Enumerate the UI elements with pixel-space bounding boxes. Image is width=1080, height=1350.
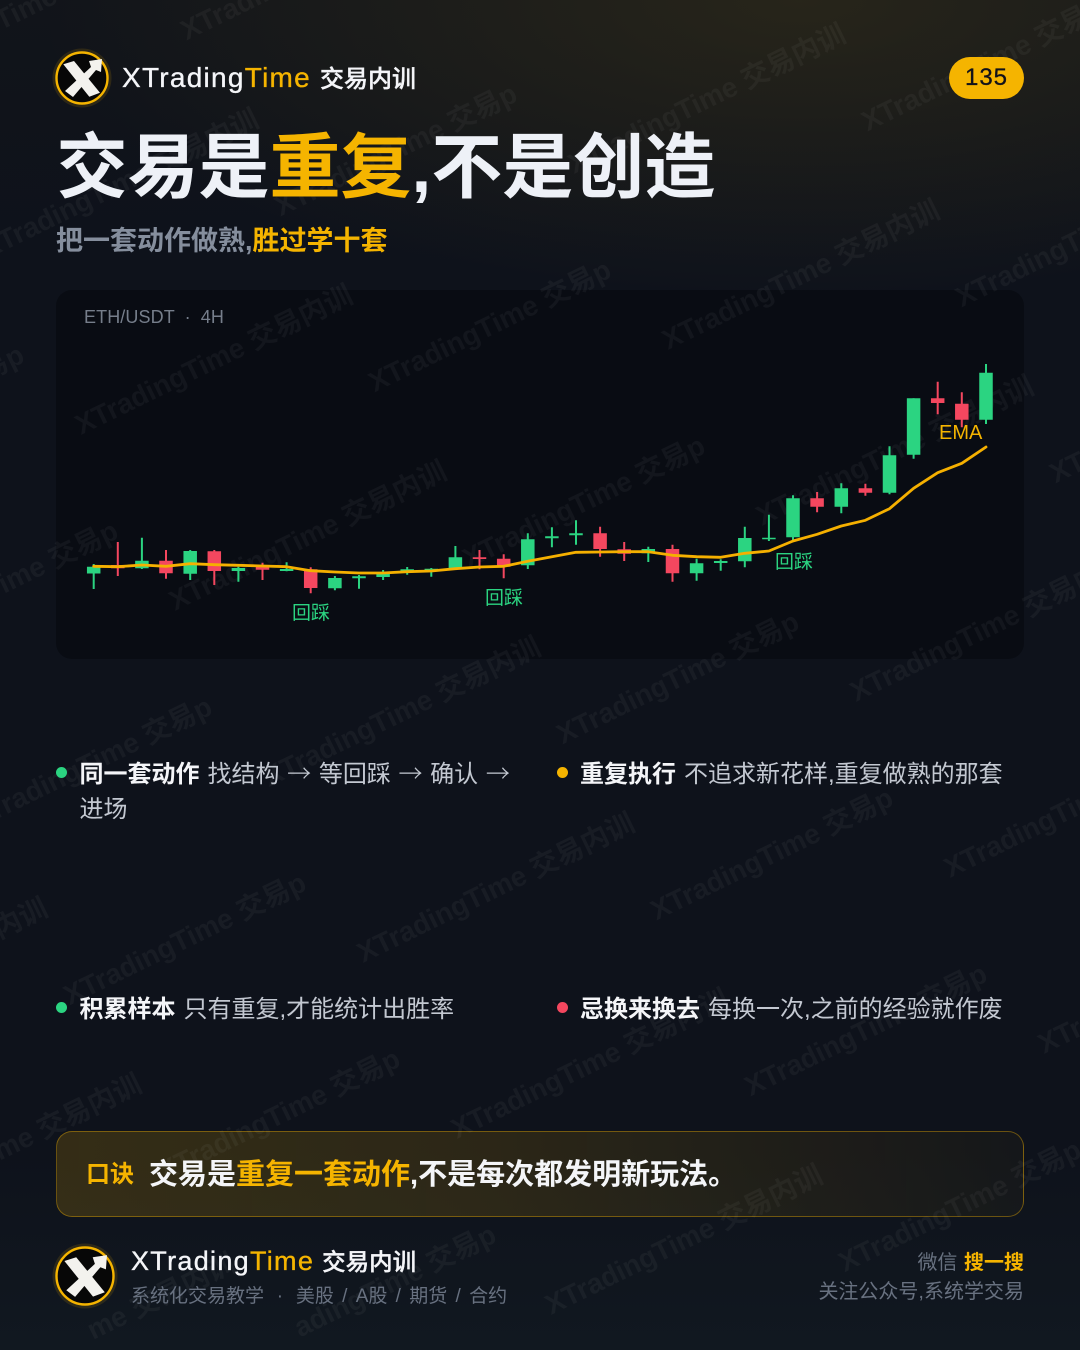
header brand name: XTradingTime 交易内训 [122,62,416,93]
icon: header logo [52,48,112,108]
watermark pattern: XTradingTime 交易内训 [164,455,451,616]
EMA label: EMA [939,422,982,444]
watermark pattern: XTradingTime 交易p [458,430,710,574]
icon: footer logo [52,1244,118,1308]
bullet dot: same action [56,767,67,778]
watermark pattern: XTradingTime 交易内训 [70,279,357,440]
bullet: avoid switching: 忌换来换去 每换一次,之前的经验就作废 [580,996,1003,1023]
watermark pattern: XTradingTime 交易内训 [258,631,545,792]
title: 交易是重复,不是创造 [56,129,715,208]
watermark pattern: XTradingTime 交易p [552,606,804,750]
watermark pattern: XTradingTime 交易内训 [352,807,639,968]
bullet: repeat: 重复执行 不追求新花样,重复做熟的那套 [580,761,1003,788]
issue number badge [949,57,1024,99]
footer brand name: XTradingTime 交易内训 [131,1246,416,1276]
footer search prompt: 微信 搜一搜 [917,1252,1024,1274]
pullback label 2: 回踩 [485,588,523,608]
subtitle: 把一套动作做熟,胜过学十套 [56,226,388,256]
pullback label 3: 回踩 [775,552,813,572]
watermark pattern: XTradingTime 交易内训 [751,370,1038,531]
bullet: samples: 积累样本 只有重复,才能统计出胜率 [80,996,454,1023]
mantra label: 口诀 [86,1161,134,1188]
watermark pattern: XTradingTime 交易p [646,782,898,926]
watermark pattern: XTradingTime 交易p [153,1043,405,1187]
bullet: same action: 进场 [80,796,128,823]
watermark pattern: XTradingTime 交易p [834,1134,1080,1278]
watermark pattern: adingTime 交易p [289,1219,501,1343]
bullet dot: samples [56,1002,67,1013]
pullback label 1: 回踩 [292,602,330,624]
callout: mantra background [56,1131,1024,1217]
watermark pattern: XTradingTime 交易内训 [540,1159,827,1320]
bullet dot: repeat [557,767,568,778]
footer tagline: 系统化交易教学 · 美股 / A股 / 期货 / 合约 [131,1286,507,1307]
bullet: same action [80,754,510,823]
issue number badge: 135 [965,64,1008,91]
chart pair label: ETH/USDT · 4H [84,307,224,327]
watermark pattern: XTradingTime 交易内训 [446,983,733,1144]
watermark pattern: XTradingTime 交易p [740,958,992,1102]
bullet dot: avoid switching [557,1002,568,1013]
footer follow note: 关注公众号,系统学交易 [818,1281,1024,1303]
watermark pattern: XTradingTime 交易内训 [563,18,850,179]
bullet: same action: 同一套动作 找结构 → 等回踩 → 确认 → [80,754,510,789]
watermark pattern: XTradingTime 交易内训 [657,194,944,355]
mantra text: 交易是重复一套动作,不是每次都发明新玩法。 [149,1159,737,1191]
watermark pattern: me 交易内训 [82,1247,240,1345]
watermark pattern: XTradingTime 交易p [364,254,616,398]
panel: candlestick chart [56,290,1024,659]
watermark pattern: XTradingTime 交易p [270,78,522,222]
watermark pattern: XTradingTime 交易p [59,867,311,1011]
